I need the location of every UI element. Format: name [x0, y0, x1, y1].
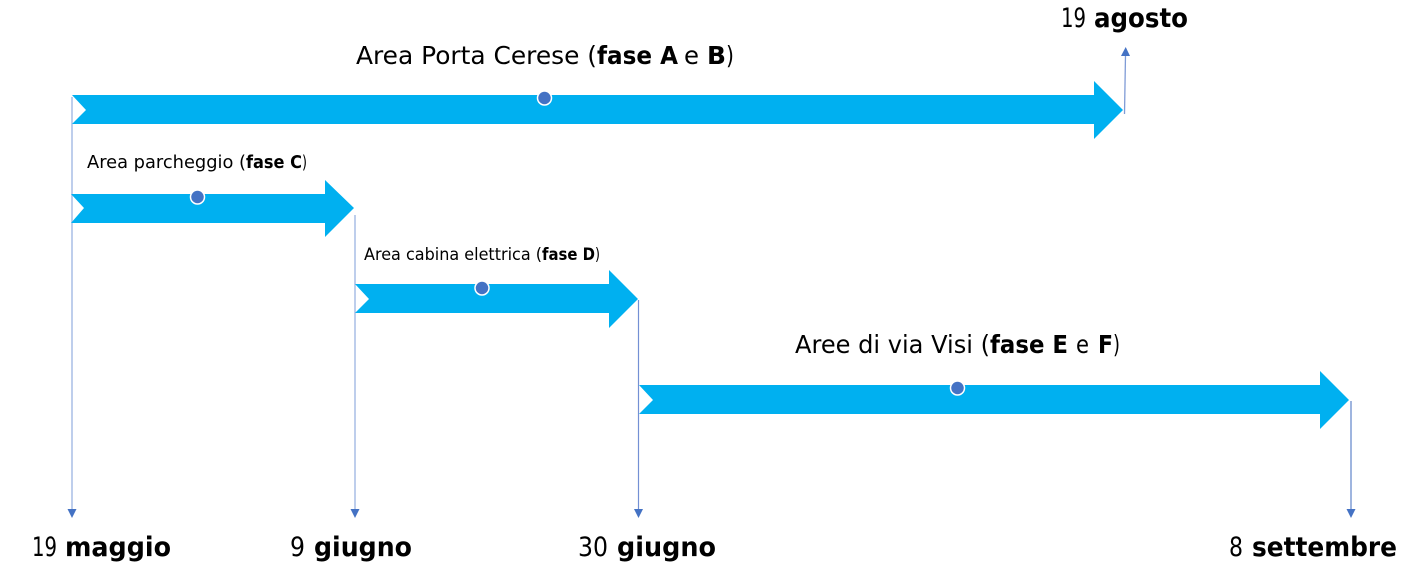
- arrow: fase C: [71, 180, 354, 237]
- marker: fase A e B: [538, 91, 552, 105]
- date: 19 maggio: maggio: [65, 532, 171, 563]
- heading: Area cabina elettrica: ): [595, 245, 600, 265]
- arrow: fase D: [355, 270, 638, 328]
- timeline line: 19 agosto: [1121, 47, 1130, 114]
- heading: Area cabina elettrica: Area cabina elettrica (: [364, 245, 542, 265]
- heading: Area parcheggio: ): [302, 152, 307, 173]
- date: 8 settembre: settembre: [1252, 532, 1397, 563]
- date: 19 maggio: 19: [32, 532, 57, 563]
- heading: Aree di via Visi: fase E: [990, 330, 1068, 359]
- timeline line: 8 settembre: [1346, 401, 1356, 518]
- heading: Area Porta Cerese: [356, 41, 734, 70]
- timeline line: 9 giugno: [350, 215, 360, 518]
- heading: Aree di via Visi: Aree di via Visi (: [795, 330, 990, 359]
- timeline line: 30 giugno: [634, 300, 643, 518]
- heading: Area parcheggio: Area parcheggio (: [87, 152, 246, 173]
- timeline line: 19 maggio: [68, 97, 76, 518]
- date: 30 giugno: 30: [578, 532, 608, 563]
- heading: Area parcheggio: fase C: [246, 152, 302, 173]
- arrow: fase E e F: [639, 371, 1349, 429]
- marker: fase E e F: [950, 381, 964, 395]
- heading: Aree di via Visi: ): [1113, 330, 1120, 359]
- date: 30 giugno: [578, 532, 716, 563]
- heading: Aree di via Visi: F: [1098, 330, 1113, 359]
- arrow: fase A e B: [72, 81, 1123, 139]
- date: 8 settembre: 8: [1229, 532, 1243, 563]
- heading: Area Porta Cerese: B: [707, 41, 726, 70]
- heading: Area Porta Cerese: ): [726, 41, 734, 70]
- heading: Aree di via Visi: e: [1076, 330, 1089, 359]
- marker: fase D: [475, 281, 489, 295]
- heading: Area cabina elettrica: fase D: [542, 245, 595, 265]
- heading: Area Porta Cerese: e: [684, 41, 699, 70]
- date: 30 giugno: giugno: [617, 532, 716, 563]
- heading: Area Porta Cerese: fase A: [597, 41, 679, 70]
- marker: fase C: [190, 190, 204, 204]
- date: 19 agosto: agosto: [1094, 3, 1188, 34]
- date: 19 agosto: [1061, 3, 1188, 34]
- date: 9 giugno: 9: [290, 532, 305, 563]
- heading: Area Porta Cerese: Area Porta Cerese (: [356, 41, 597, 70]
- heading: Aree di via Visi: [795, 330, 1120, 359]
- date: 9 giugno: giugno: [314, 532, 412, 563]
- date: 19 agosto: 19: [1061, 3, 1086, 34]
